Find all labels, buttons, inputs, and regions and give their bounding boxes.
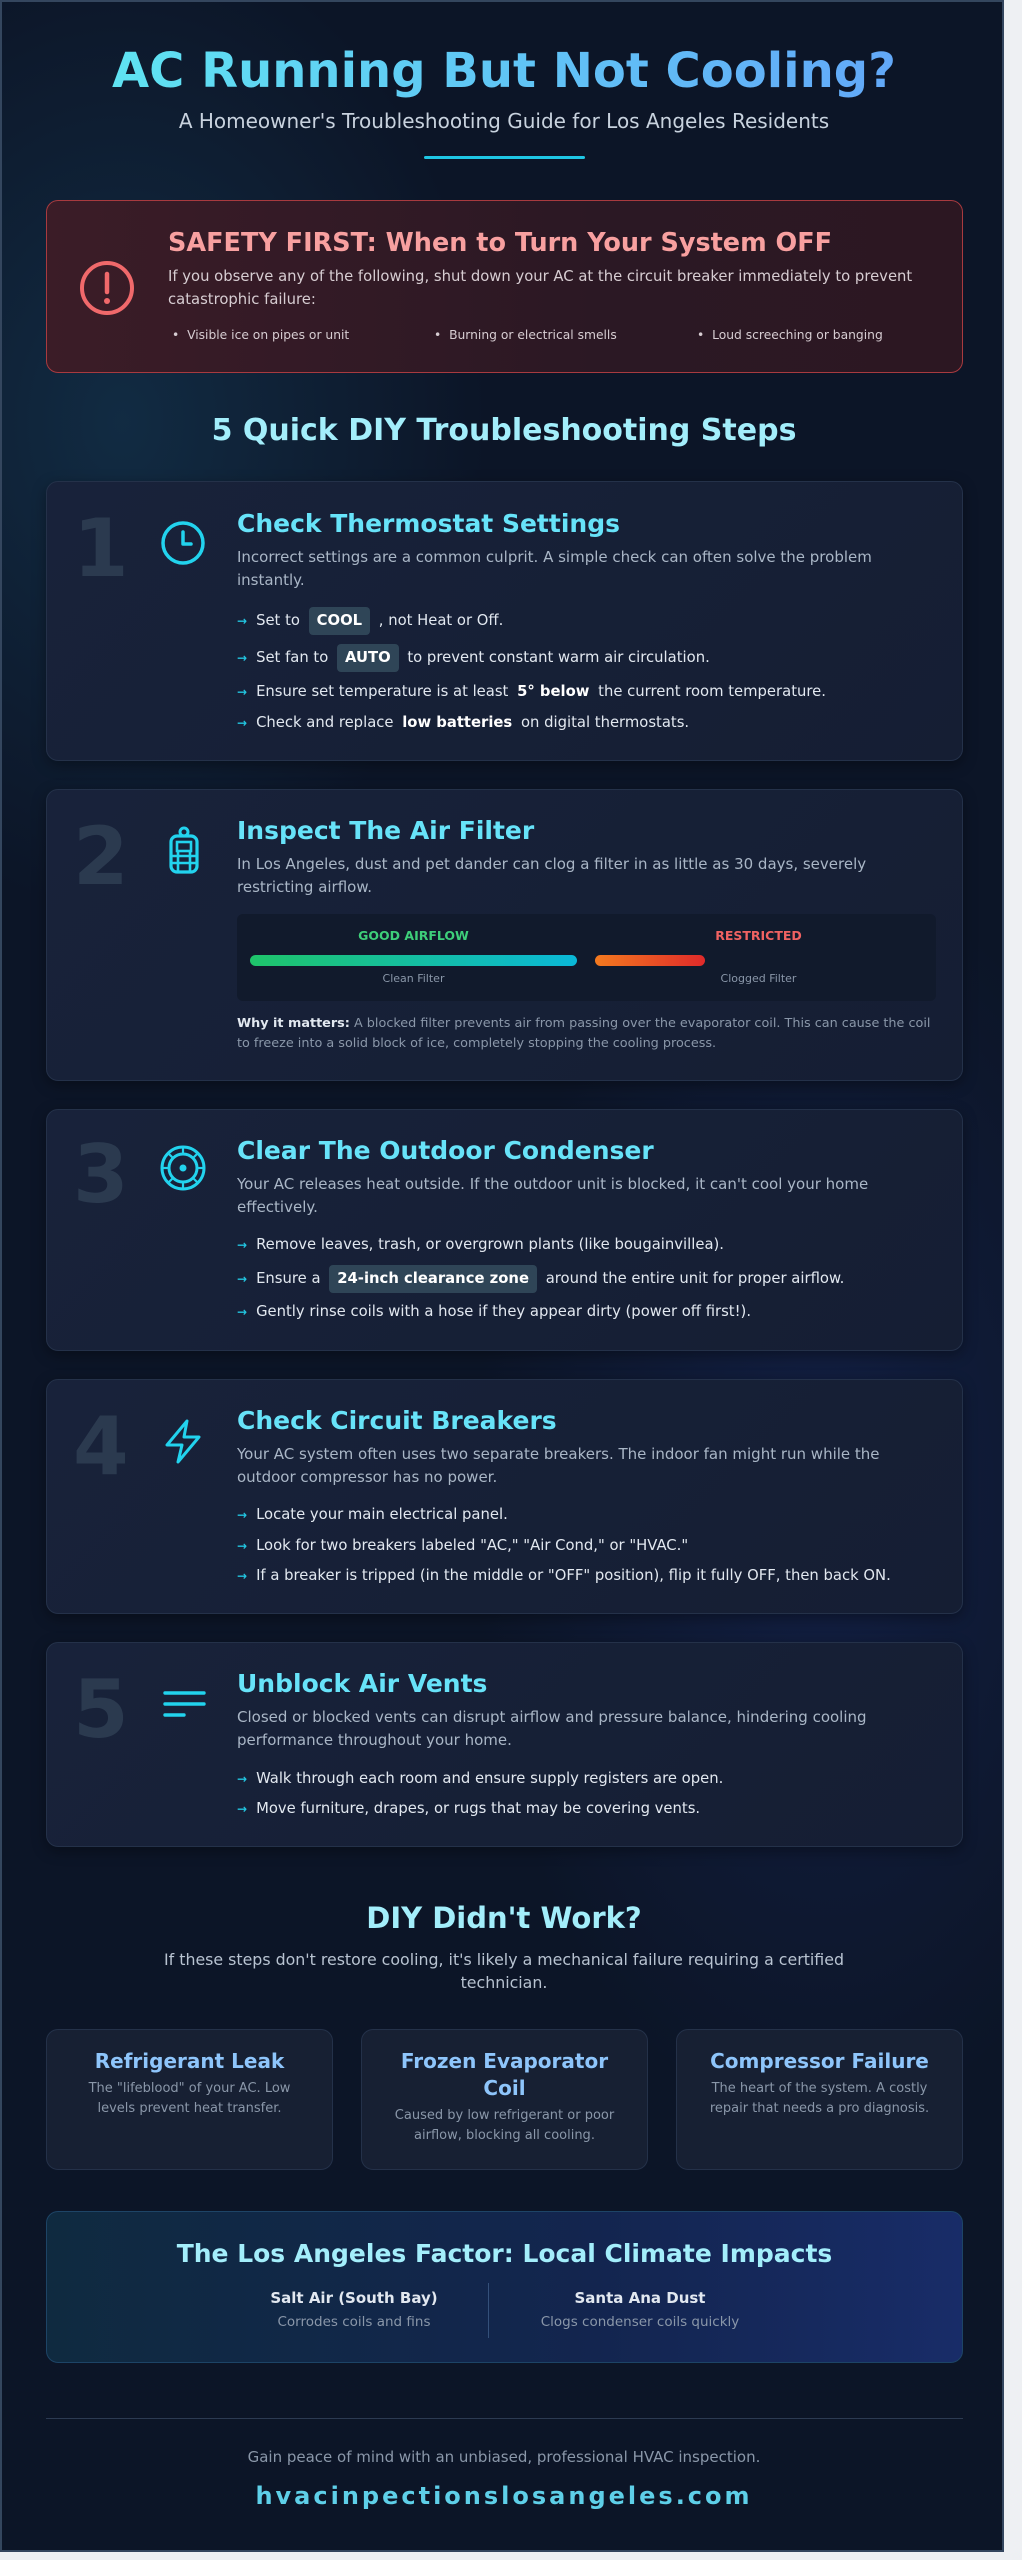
good airflow label: GOOD AIRFLOW [358, 928, 469, 943]
card: refrigerant leak: Refrigerant Leak [95, 2049, 284, 2073]
title underline [424, 156, 585, 159]
subtitle: A Homeowner's Troubleshooting Guide for Los Angeles Residents [179, 109, 829, 133]
step 3 list: → Ensure a around the entire unit for proper airflow. [237, 1270, 844, 1287]
step 2 text: In Los Angeles, dust and pet dander can clog a filter in as little as 30 days, severely restricting airflow. [237, 855, 866, 896]
icon: condenser fan [160, 1146, 206, 1190]
panel: step 4 [46, 1379, 963, 1614]
clean bar [250, 955, 577, 966]
restricted bar [595, 955, 705, 966]
number 2: 2 [73, 810, 129, 903]
step 5 title: Unblock Air Vents [237, 1669, 487, 1698]
salt air: Salt Air (South Bay) [270, 2289, 438, 2307]
salt air [270, 2289, 438, 2330]
santa ana dust: Santa Ana Dust [574, 2289, 705, 2307]
santa ana dust [541, 2289, 739, 2330]
step 1 list: AUTO [345, 649, 391, 666]
step 1 list: → Ensure set temperature is at least 5° below the current room temperature. [237, 683, 826, 700]
panel: step 2 [46, 789, 963, 1081]
number 5: 5 [73, 1663, 129, 1756]
safety bullets: • Burning or electrical smells [434, 328, 617, 342]
panel: step 3 [46, 1109, 963, 1351]
step 1 list [237, 607, 826, 731]
safety bullets: • Loud screeching or banging [697, 328, 883, 342]
icon: filter [169, 826, 199, 874]
step 4 text: Your AC system often uses two separate breakers. The indoor fan might run while the outdoor compressor has no power. [237, 1445, 880, 1486]
icon: vent lines [163, 1691, 206, 1717]
clogged caption: Clogged Filter [721, 972, 796, 985]
safety bullets: • Visible ice on pipes or unit [172, 328, 349, 342]
number 3: 3 [73, 1128, 129, 1221]
step 2 title: Inspect The Air Filter [237, 816, 534, 845]
DIY text: If these steps don't restore cooling, it's likely a mechanical failure requiring a certified technician. [164, 1950, 844, 1992]
card: frozen coil [361, 2029, 648, 2170]
icon: clock [161, 521, 205, 565]
step 5 text: Closed or blocked vents can disrupt airflow and pressure balance, hindering cooling performance throughout your home. [237, 1708, 867, 1749]
footer text: Gain peace of mind with an unbiased, professional HVAC inspection. [248, 2448, 760, 2466]
step 1 title: Check Thermostat Settings [237, 509, 620, 538]
why it matters: Why it matters: A blocked filter prevents air from passing over the evaporator coil. This can cause the coil to freeze into a solid block of ice, completely stopping the cooling process. [237, 1016, 930, 1051]
card: compressor failure [676, 2029, 963, 2170]
step 3 list: 24-inch clearance zone [337, 1270, 529, 1287]
panel: step 5 [46, 1642, 963, 1847]
icon: lightning [165, 1420, 201, 1464]
card: refrigerant leak [46, 2029, 333, 2170]
step 5 list: → Move furniture, drapes, or rugs that may be covering vents. [237, 1800, 700, 1817]
restricted label: RESTRICTED [715, 928, 802, 943]
safety bullets [172, 328, 883, 342]
step 4 list: → Look for two breakers labeled "AC," "Air Cond," or "HVAC." [237, 1537, 688, 1554]
step 3 title: Clear The Outdoor Condenser [237, 1136, 654, 1165]
step 1 list: COOL [317, 612, 362, 629]
step 1 text: Incorrect settings are a common culprit. A simple check can often solve the problem instantly. [237, 548, 872, 589]
step 1 list: → Check and replace low batteries on digital thermostats. [237, 714, 689, 731]
number 1: 1 [73, 502, 129, 595]
step 4 title: Check Circuit Breakers [237, 1406, 557, 1435]
heading: DIY didn't work: DIY Didn't Work? [366, 1901, 642, 1935]
step 1 list: → Set fan to to prevent constant warm air circulation. [237, 649, 710, 666]
LA title: The Los Angeles Factor: Local Climate Impacts [177, 2239, 832, 2268]
panel: LA factor [46, 2211, 963, 2363]
step 3 list: → Remove leaves, trash, or overgrown plants (like bougainvillea). [237, 1236, 724, 1253]
step 3 text: Your AC releases heat outside. If the outdoor unit is blocked, it can't cool your home effectively. [237, 1175, 868, 1216]
step 5 list: → Walk through each room and ensure supply registers are open. [237, 1770, 723, 1787]
step 5 list [237, 1770, 723, 1817]
card: frozen coil: Frozen Evaporator Coil [401, 2049, 608, 2100]
santa ana dust: Clogs condenser coils quickly [541, 2314, 739, 2330]
step 3 list: → Gently rinse coils with a hose if they appear dirty (power off first!). [237, 1303, 751, 1320]
card: frozen coil: Caused by low refrigerant or poor airflow, blocking all cooling. [395, 2108, 614, 2143]
icon: warning [80, 261, 134, 315]
step 4 list: → If a breaker is tripped (in the middle or "OFF" position), flip it fully OFF, then back ON. [237, 1567, 891, 1584]
card: refrigerant leak: The "lifeblood" of your AC. Low levels prevent heat transfer. [89, 2081, 290, 2116]
step 3 list [237, 1236, 844, 1320]
clean caption: Clean Filter [383, 972, 444, 985]
salt air: Corrodes coils and fins [277, 2314, 430, 2330]
footer url: hvacinpectionslosangeles.com [255, 2482, 753, 2510]
step 4 list [237, 1506, 891, 1584]
airflow chart [237, 914, 936, 1001]
safety text: If you observe any of the following, shut down your AC at the circuit breaker immediately to prevent catastrophic failure: [168, 268, 912, 308]
card: compressor failure: Compressor Failure [710, 2049, 929, 2073]
title: AC Running But Not Cooling? [112, 43, 896, 99]
panel: safety first [46, 200, 963, 373]
step 4 list: → Locate your main electrical panel. [237, 1506, 508, 1523]
safety heading: SAFETY FIRST: When to Turn Your System OFF [168, 228, 832, 258]
card: compressor failure: The heart of the system. A costly repair that needs a pro diagnosis. [710, 2081, 929, 2116]
step 1 list: → Set to , not Heat or Off. [237, 612, 503, 629]
number 4: 4 [73, 1400, 129, 1493]
heading: 5 steps: 5 Quick DIY Troubleshooting Steps [212, 413, 796, 448]
panel: step 1 [46, 481, 963, 761]
